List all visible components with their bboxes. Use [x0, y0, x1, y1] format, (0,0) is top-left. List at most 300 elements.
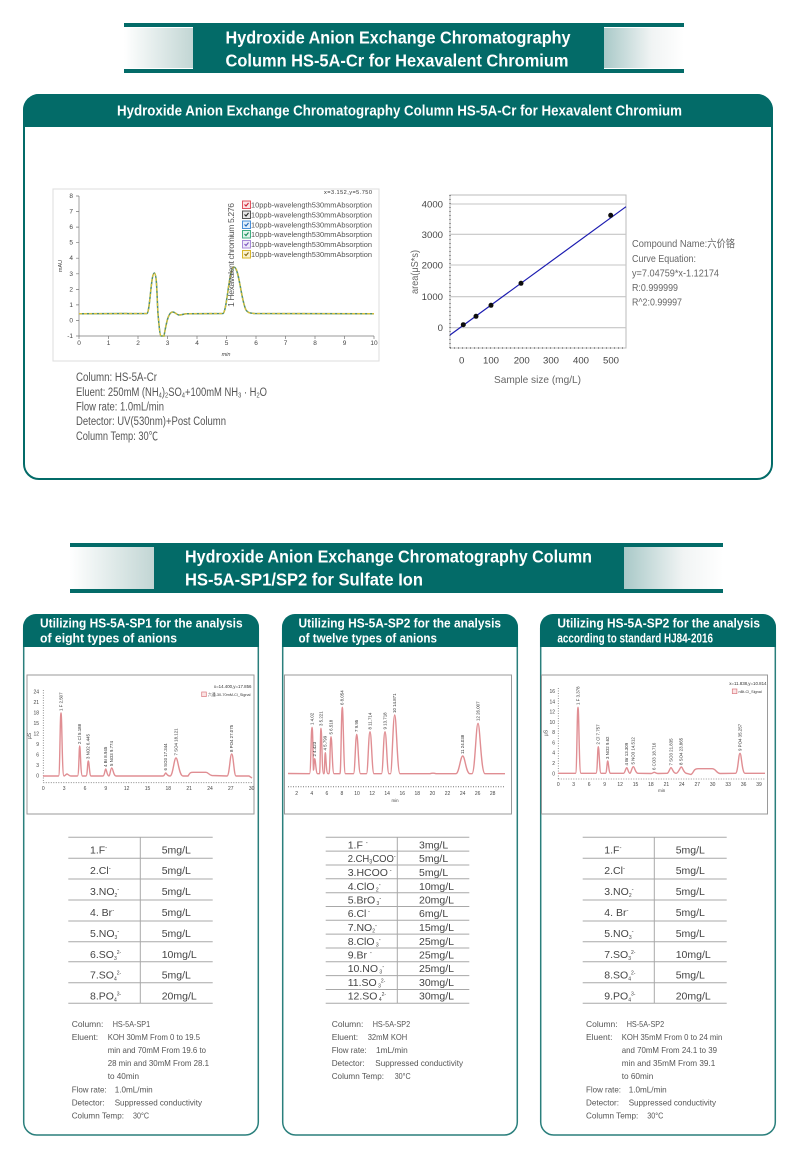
table: HJ84-2016 anion concentrations: 3.NO — [604, 886, 629, 898]
scatter chart: calibration curve: 400 — [573, 356, 589, 366]
table: twelve anion concentrations: 4 — [377, 997, 382, 1003]
line chart: UV chromatogram: mAU — [58, 260, 64, 272]
text block: Cr test conditions: +100mM NH — [185, 387, 238, 399]
chromatogram: eight anions: 9 — [36, 742, 39, 748]
table: eight anion concentrations: 2- — [117, 970, 121, 976]
table: HJ84-2016 anion concentrations: 1.F — [604, 844, 619, 856]
table: HJ84-2016 anion concentrations: 10mg/L — [676, 949, 711, 961]
table: twelve anion concentrations: 11.SO — [348, 977, 377, 989]
line chart: UV chromatogram: 3 — [69, 271, 73, 278]
table: eight anion concentrations: 5mg/L — [162, 928, 191, 940]
chart legend — [732, 689, 762, 694]
chart legend — [242, 200, 372, 259]
table: twelve anion concentrations: 3.HCOO — [348, 867, 388, 879]
table: eight anion concentrations: 4 — [114, 976, 117, 982]
scatter chart: calibration curve: 100 — [483, 356, 499, 366]
chromatogram: HJ84-2016 anions: 18 — [648, 782, 654, 788]
table: eight anion concentrations: 5mg/L — [162, 886, 191, 898]
table: twelve anion concentrations: - — [375, 923, 377, 929]
table: HJ84-2016 anion concentrations: 3- — [631, 992, 636, 998]
chromatogram: twelve anions: 4 — [310, 791, 313, 797]
table: twelve anion concentrations: 2 — [375, 887, 379, 893]
scatter chart: calibration curve: 500 — [603, 356, 619, 366]
chromatogram: eight anions: 6 — [36, 753, 39, 759]
line chart: UV chromatogram: 10 — [370, 340, 378, 347]
table: eight anion concentrations: 3 — [114, 956, 117, 962]
chromatogram: eight anions: 21 — [33, 700, 39, 706]
table: twelve anion concentrations: 3mg/L — [419, 840, 448, 852]
chromatogram: twelve anions: 5 6.518 — [328, 719, 333, 734]
text block: HJ84-2016 test conditions: HS-5A-SP2 — [627, 1019, 664, 1029]
chromatogram: HJ84-2016 anions: 0 — [557, 782, 560, 788]
table: eight anion concentrations — [68, 837, 213, 1004]
text block: HJ84-2016 test conditions: to 60min — [622, 1071, 654, 1081]
chromatogram: eight anions: 3 — [63, 786, 66, 792]
chromatogram: HJ84-2016 anions: 27 — [695, 782, 700, 788]
chromatogram: HJ84-2016 anions: μS — [544, 729, 550, 736]
table: twelve anion concentrations: - — [382, 965, 384, 971]
panel header — [282, 614, 518, 647]
chart legend — [202, 692, 251, 697]
table: twelve anion concentrations — [326, 837, 469, 1003]
table: twelve anion concentrations: 25mg/L — [419, 950, 454, 962]
text block: Cr test conditions: 3 — [238, 392, 241, 400]
table: eight anion concentrations: 3- — [117, 992, 121, 998]
panel: HS-5A-SP1 eight anions — [23, 614, 259, 1135]
chromatogram: HJ84-2016 anions: 3 — [572, 782, 575, 788]
panel: hexavalent chromium — [23, 94, 773, 479]
chromatogram: twelve anions: 9 13.718 — [382, 712, 387, 730]
text block: curve equation: Curve Equation: — [632, 253, 696, 265]
panel header: of twelve types of anions — [298, 631, 437, 646]
panel: HS-5A-SP2 twelve anions — [282, 614, 518, 1135]
text block: Cr test conditions: Flow rate: 1.0mL/min — [76, 402, 164, 414]
text block: HJ84-2016 test conditions: Flow rate: — [586, 1084, 621, 1094]
table: twelve anion concentrations: 3 — [375, 942, 379, 948]
chromatogram: twelve anions: 8 11.714 — [367, 712, 372, 730]
chromatogram: eight anions: 2 Cl 5.188 — [77, 723, 82, 744]
banner: sulfate ion section title: HS-5A-SP1/SP2 for Sulfate Ion — [185, 570, 423, 590]
table: twelve anion concentrations: 1.F — [348, 840, 363, 852]
chromatogram: HJ84-2016 anions: 7 SO3 21.835 — [668, 738, 673, 766]
text block: SP1 test conditions: Detector: — [72, 1097, 105, 1107]
panel header: Utilizing HS-5A-SP1 for the analysis — [40, 616, 243, 631]
table: eight anion concentrations: 3 — [115, 935, 118, 941]
chromatogram: eight anions: 1 F 2.507 — [58, 692, 64, 711]
line chart: UV chromatogram: 3 — [166, 340, 170, 347]
chromatogram: eight anions: μS — [27, 732, 33, 739]
chromatogram: eight anions: 7 SO4 18.121 — [173, 728, 178, 756]
chromatogram: twelve anions: 14 — [384, 791, 390, 797]
line chart: UV chromatogram: x=3.152,y=5.750 — [324, 190, 372, 196]
table: HJ84-2016 anion concentrations: 5mg/L — [676, 928, 705, 940]
text block: curve equation: R:0.999999 — [632, 282, 678, 294]
scatter chart: calibration curve: 1000 — [422, 292, 443, 303]
text block: SP2 test conditions: Detector: — [332, 1058, 365, 1068]
chromatogram: HJ84-2016 anions: 2 Cl 7.757 — [596, 724, 601, 744]
banner: hexavalent chromium section title — [124, 23, 684, 73]
text block: HJ84-2016 test conditions: min and 35mM From 39.1 — [622, 1058, 716, 1068]
chromatogram: twelve anions: 2 4.423 — [312, 741, 317, 756]
chromatogram: twelve anions: 20 — [430, 791, 435, 797]
chromatogram: eight anions: 21 — [186, 786, 192, 792]
table: eight anion concentrations: 1.F — [90, 844, 105, 856]
line chart: UV chromatogram: 5 — [69, 240, 73, 247]
text block: Cr test conditions: · H — [241, 387, 256, 399]
table: twelve anion concentrations: 25mg/L — [419, 963, 454, 975]
table: eight anion concentrations: - — [117, 887, 119, 893]
table: HJ84-2016 anion concentrations: - — [619, 846, 621, 852]
table: HJ84-2016 anion concentrations: 4 — [628, 976, 631, 982]
line chart: UV chromatogram: 1 — [107, 340, 111, 347]
table: HJ84-2016 anion concentrations: - — [623, 866, 625, 872]
chromatogram: eight anions: 24 — [33, 690, 39, 696]
table: twelve anion concentrations: - — [379, 937, 381, 943]
chromatogram: HJ84-2016 anions: 14 — [549, 699, 555, 705]
line chart: UV chromatogram: 8 — [313, 340, 317, 347]
chromatogram: HJ84-2016 anions: 8 SO4 23.865 — [679, 737, 684, 765]
table: eight anion concentrations: 5mg/L — [162, 865, 191, 877]
table: twelve anion concentrations: 25mg/L — [419, 936, 454, 948]
chromatogram: twelve anions: 26 — [475, 791, 481, 797]
chromatogram: eight anions: 8 PO4 27.075 — [229, 724, 234, 752]
text block: SP1 test conditions: Suppressed conductivity — [115, 1097, 203, 1107]
table: HJ84-2016 anion concentrations: 5mg/L — [676, 970, 705, 982]
text block: SP2 test conditions: Column: — [332, 1019, 363, 1029]
table: twelve anion concentrations: - — [366, 909, 370, 915]
chromatogram: twelve anions: 12 — [369, 791, 375, 797]
text block: HJ84-2016 test conditions: Detector: — [586, 1097, 619, 1107]
chromatogram: eight anions: 24 — [207, 786, 213, 792]
chart legend: 10ppb-wavelength530mmAbsorption — [251, 250, 372, 259]
line chart: UV chromatogram: 7 — [69, 209, 73, 216]
line chart: UV chromatogram: 7 — [284, 340, 288, 347]
table: eight anion concentrations: 2- — [117, 950, 121, 956]
panel header: according to standard HJ84-2016 — [557, 631, 713, 646]
chromatogram: eight anions: 3 NO2 6.445 — [86, 734, 91, 759]
chromatogram: twelve anions — [284, 675, 512, 814]
chart legend: 10ppb-wavelength530mmAbsorption — [251, 220, 372, 230]
table: HJ84-2016 anion concentrations: - — [626, 908, 628, 914]
line chart: UV chromatogram: 8 — [69, 193, 73, 200]
line chart: UV chromatogram: 4 — [69, 255, 73, 262]
chromatogram: twelve anions: 24 — [460, 791, 466, 797]
chromatogram: HJ84-2016 anions: x=11.838,y=10.814 — [729, 681, 767, 686]
chromatogram: eight anions: x=14.400,y=17.856 — [214, 684, 252, 689]
text block: Cr test conditions: Detector: UV(530nm)+Post Column — [76, 416, 226, 428]
table: eight anion concentrations: 5mg/L — [162, 907, 191, 919]
table: twelve anion concentrations: 10.NO — [348, 963, 378, 975]
table: twelve anion concentrations: 5.BrO — [348, 894, 375, 906]
chromatogram: twelve anions: 28 — [490, 791, 496, 797]
text block: SP2 test conditions: 30°C — [395, 1071, 411, 1081]
chromatogram: HJ84-2016 anions: 9 — [603, 782, 606, 788]
table: twelve anion concentrations: 9.Br — [348, 950, 367, 962]
table: twelve anion concentrations: - — [370, 950, 372, 956]
table: twelve anion concentrations: 2- — [381, 978, 386, 984]
table: HJ84-2016 anion concentrations: 4 — [628, 998, 631, 1004]
text block: SP1 test conditions: 1.0mL/min — [115, 1084, 153, 1094]
table: twelve anion concentrations: 7.NO — [348, 922, 372, 934]
chromatogram: eight anions: 27 — [228, 786, 234, 792]
banner: sulfate ion section title — [70, 543, 723, 593]
text block: SP1 test conditions: HS-5A-SP1 — [113, 1019, 150, 1029]
table: twelve anion concentrations: 6mg/L — [419, 908, 448, 920]
text block: Cr test conditions: 4 — [159, 392, 162, 400]
chromatogram: HJ84-2016 anions: 39 — [756, 782, 762, 788]
chromatogram: HJ84-2016 anions: 21 — [664, 782, 669, 788]
line chart: UV chromatogram: 0 — [77, 340, 81, 347]
table: twelve anion concentrations: 2.CH — [348, 853, 372, 865]
chromatogram: twelve anions: 8 — [341, 791, 344, 797]
text block: SP1 test conditions: Eluent: — [72, 1032, 98, 1042]
text block: SP1 test conditions: Column Temp: — [72, 1111, 124, 1121]
text block: Cr test conditions: Column Temp: 30℃ — [76, 431, 158, 443]
text block: Cr test conditions: 2 — [165, 392, 168, 400]
scatter chart: calibration curve: 3000 — [422, 230, 443, 241]
table: eight anion concentrations: - — [112, 908, 114, 914]
panel header — [23, 94, 773, 127]
chromatogram: HJ84-2016 anions: 6 — [552, 740, 555, 746]
table: HJ84-2016 anion concentrations: 5mg/L — [676, 907, 705, 919]
chromatogram: twelve anions: 18 — [415, 791, 420, 797]
chromatogram: eight anions: 4 Br 8.945 — [103, 746, 108, 767]
text block: SP1 test conditions: 28 min and 30mM From 28.1 — [108, 1058, 209, 1068]
panel header — [540, 614, 776, 647]
text block: HJ84-2016 test conditions: Column: — [586, 1019, 618, 1029]
chromatogram: HJ84-2016 anions: 4 Br 13.309 — [624, 742, 629, 766]
line chart: UV chromatogram — [53, 189, 379, 361]
text block: SP1 test conditions: KOH 30mM From 0 to 19.5 — [108, 1032, 200, 1042]
text block: HJ84-2016 test conditions: 1.0mL/min — [629, 1084, 667, 1094]
chromatogram: twelve anions: 11 24.038 — [460, 734, 465, 754]
text block: SP1 test conditions: Column: — [72, 1019, 103, 1029]
chromatogram: HJ84-2016 anions: 10 — [549, 720, 555, 726]
table: HJ84-2016 anion concentrations: 4. Br — [604, 907, 626, 919]
chromatogram: twelve anions: 3 5.221 — [318, 711, 323, 726]
table: twelve anion concentrations: 4.ClO — [348, 881, 375, 893]
chromatogram: twelve anions: 6 8.054 — [340, 690, 345, 705]
panel header: of eight types of anions — [40, 631, 177, 646]
chromatogram: HJ84-2016 anions: 3 NO2 9.62 — [605, 736, 610, 759]
chromatogram: eight anions: 12 — [33, 732, 39, 738]
chromatogram: eight anions: 30 — [249, 786, 255, 792]
table: twelve anion concentrations: COO — [372, 853, 394, 865]
chromatogram: twelve anions: 6 — [326, 791, 329, 797]
table: twelve anion concentrations: 30mg/L — [419, 977, 454, 989]
table: twelve anion concentrations: 3 — [375, 901, 380, 907]
text block: SP1 test conditions: min and 70mM From 19.6 to — [108, 1045, 206, 1055]
text block: curve equation: R^2:0.99997 — [632, 296, 682, 308]
text block: SP1 test conditions — [72, 1019, 209, 1121]
chromatogram: HJ84-2016 anions: 16 — [549, 689, 555, 695]
line chart: UV chromatogram: 4 — [195, 340, 199, 347]
chromatogram: twelve anions: 12 26.007 — [475, 701, 480, 721]
text block: Cr test conditions: Column: HS-5A-Cr — [76, 372, 157, 384]
chromatogram: twelve anions: 4 5.799 — [323, 735, 328, 750]
chromatogram: eight anions — [27, 675, 255, 814]
text block: SP1 test conditions: 30°C — [133, 1111, 149, 1121]
text block: SP2 test conditions: Suppressed conductivity — [375, 1058, 464, 1068]
chromatogram: HJ84-2016 anions: 6 CO3 18.716 — [652, 742, 657, 770]
chromatogram: twelve anions: 2 — [295, 791, 298, 797]
text block: SP2 test conditions — [332, 1019, 464, 1081]
chromatogram: HJ84-2016 anions: 33 — [725, 782, 731, 788]
text block: SP2 test conditions: 1mL/min — [376, 1045, 408, 1055]
table: HJ84-2016 anion concentrations: 2- — [631, 970, 636, 976]
scatter chart: calibration curve: 4000 — [422, 200, 443, 210]
banner: sulfate ion section title: Hydroxide Anion Exchange Chromatography Column — [185, 547, 592, 567]
chart legend: 10ppb-wavelength530mmAbsorption — [251, 200, 372, 210]
chromatogram: HJ84-2016 anions: 12 — [549, 710, 555, 716]
chromatogram: HJ84-2016 anions: 12 — [617, 782, 623, 788]
chromatogram: eight anions: 18 — [166, 786, 171, 792]
table: HJ84-2016 anion concentrations: 3 — [628, 956, 631, 962]
table: eight anion concentrations: - — [117, 929, 119, 935]
table: eight anion concentrations: 6.SO — [90, 949, 114, 961]
table: twelve anion concentrations: - — [379, 896, 381, 902]
text block: SP2 test conditions: 32mM KOH — [368, 1032, 407, 1042]
table: HJ84-2016 anion concentrations: 3 — [629, 935, 632, 941]
text block: HJ84-2016 test conditions — [586, 1019, 723, 1121]
chart legend: 10ppb-wavelength530mmAbsorption — [251, 230, 372, 239]
table: twelve anion concentrations: 8.ClO — [348, 936, 375, 948]
chromatogram: HJ84-2016 anions: 36 — [741, 782, 747, 788]
table: twelve anion concentrations: 5mg/L — [419, 867, 448, 879]
table: HJ84-2016 anion concentrations: 8.SO — [604, 970, 628, 982]
scatter chart: calibration curve: 0 — [438, 323, 443, 334]
table: eight anion concentrations: 3.NO — [90, 886, 115, 898]
table: twelve anion concentrations: 5mg/L — [419, 853, 448, 865]
text block: SP2 test conditions: Flow rate: — [332, 1045, 367, 1055]
chromatogram: HJ84-2016 anions: 4 — [552, 751, 555, 757]
scatter chart: calibration curve: 0 — [459, 356, 464, 366]
chart legend: 10ppb-wavelength530mmAbsorption — [251, 210, 372, 220]
chromatogram: eight anions: 3 — [36, 763, 39, 769]
text block: Cr test conditions: O — [260, 387, 267, 399]
chromatogram: HJ84-2016 anions: 15 — [633, 782, 638, 788]
chart legend: 10ppb-wavelength530mmAbsorption — [251, 240, 372, 249]
line chart: UV chromatogram: 0 — [69, 318, 73, 324]
table: twelve anion concentrations: 2- — [382, 992, 386, 998]
text block: HJ84-2016 test conditions: Suppressed conductivity — [629, 1097, 717, 1107]
text block: Cr test conditions: 2 — [256, 392, 260, 400]
line chart: UV chromatogram: 1 Hexavalent chromium 5.276 — [226, 203, 236, 307]
scatter chart: calibration curve — [409, 195, 626, 386]
table: twelve anion concentrations: 30mg/L — [419, 990, 454, 1002]
scatter chart: calibration curve: 200 — [514, 356, 530, 366]
text block: SP2 test conditions: HS-5A-SP2 — [373, 1019, 410, 1029]
scatter chart: calibration curve: 300 — [543, 356, 559, 366]
line chart: UV chromatogram: 5 — [225, 340, 229, 347]
table: HJ84-2016 anion concentrations: - — [632, 929, 634, 935]
line chart: UV chromatogram: 6 — [254, 340, 258, 347]
text block: Cr test conditions: Eluent: 250mM (NH — [76, 387, 177, 399]
table: twelve anion concentrations: - — [388, 868, 392, 874]
text block: curve equation: Compound Name:六价铬 — [632, 237, 735, 250]
table: HJ84-2016 anion concentrations: 20mg/L — [676, 990, 711, 1002]
table: twelve anion concentrations: - — [366, 840, 368, 846]
text block: Cr test conditions: ) — [162, 387, 165, 399]
table: HJ84-2016 anion concentrations: 7.SO — [604, 949, 628, 961]
chromatogram: HJ84-2016 anions: 30 — [710, 782, 716, 788]
text block: Cr test conditions — [76, 372, 267, 443]
table: twelve anion concentrations: 2 — [372, 928, 375, 934]
table: HJ84-2016 anion concentrations: 2- — [631, 950, 636, 956]
table: twelve anion concentrations: - — [379, 882, 381, 888]
text block: Cr test conditions: SO — [168, 387, 182, 399]
table: eight anion concentrations: - — [105, 846, 107, 852]
banner: hexavalent chromium section title: Column HS-5A-Cr for Hexavalent Chromium — [226, 51, 568, 71]
chromatogram: HJ84-2016 anions: 8 — [552, 730, 555, 736]
table: HJ84-2016 anion concentrations: 5mg/L — [676, 886, 705, 898]
text block: SP2 test conditions: Eluent: — [332, 1032, 358, 1042]
table: HJ84-2016 anion concentrations — [583, 837, 727, 1004]
chromatogram: HJ84-2016 anions: 1 F 3.378 — [575, 686, 580, 705]
text block: curve equation: y=7.04759*x-1.12174 — [632, 268, 719, 280]
panel header: Utilizing HS-5A-SP2 for the analysis — [298, 616, 501, 631]
panel header: Hydroxide Anion Exchange Chromatography Column HS-5A-Cr for Hexavalent Chromium — [117, 103, 682, 119]
table: eight anion concentrations: - — [109, 866, 111, 872]
panel header: Utilizing HS-5A-SP2 for the analysis — [557, 616, 760, 631]
text block: HJ84-2016 test conditions: and 70mM From 24.1 to 39 — [622, 1045, 717, 1055]
table: twelve anion concentrations: 6.Cl — [348, 908, 366, 920]
table: eight anion concentrations: 2.Cl — [90, 865, 109, 877]
scatter chart: calibration curve: Sample size (mg/L) — [494, 374, 581, 386]
table: HJ84-2016 anion concentrations: 5mg/L — [676, 865, 705, 877]
chromatogram: eight anions: 12 — [124, 786, 130, 792]
scatter chart: calibration curve: 2000 — [422, 260, 443, 272]
table: eight anion concentrations: 5mg/L — [162, 844, 191, 856]
chart legend: 六通-30-70mM-Cl_Signal — [208, 692, 251, 697]
table: HJ84-2016 anion concentrations: - — [632, 887, 634, 893]
chromatogram: HJ84-2016 anions: 9 PO4 35.257 — [737, 723, 742, 751]
chromatogram: eight anions: 15 — [33, 721, 39, 727]
scatter chart: calibration curve: area(μS*s) — [409, 250, 421, 294]
line chart: UV chromatogram: 1 — [69, 302, 73, 309]
chromatogram: twelve anions: 10 14.871 — [392, 693, 397, 713]
chromatogram: eight anions: 6 SO3 17.344 — [163, 743, 168, 770]
table: eight anion concentrations: 2 — [115, 893, 118, 899]
text block: HJ84-2016 test conditions: 30°C — [647, 1111, 663, 1121]
banner: hexavalent chromium section title: Hydroxide Anion Exchange Chromatography — [226, 27, 571, 47]
table: twelve anion concentrations: 3 — [378, 970, 382, 976]
table: twelve anion concentrations: - — [394, 854, 396, 860]
chromatogram: eight anions: 5 NO3 9.774 — [109, 741, 114, 766]
table: twelve anion concentrations: 3 — [369, 860, 373, 866]
table: eight anion concentrations: 5mg/L — [162, 970, 191, 982]
text block: SP1 test conditions: to 40min — [108, 1071, 139, 1081]
text block: Cr test conditions: 4 — [182, 392, 185, 400]
chromatogram: eight anions: 18 — [33, 711, 39, 717]
table: eight anion concentrations: 8.PO — [90, 990, 114, 1002]
text block: SP1 test conditions: Flow rate: — [72, 1084, 107, 1094]
chromatogram: eight anions: 9 — [104, 786, 107, 792]
chromatogram: eight anions: 0 — [36, 774, 39, 780]
line chart: UV chromatogram: min — [222, 352, 230, 358]
chromatogram: HJ84-2016 anions: min — [658, 788, 666, 793]
table: eight anion concentrations: 7.SO — [90, 970, 114, 982]
chromatogram: twelve anions: 16 — [400, 791, 405, 797]
table: HJ84-2016 anion concentrations: 5.NO — [604, 928, 629, 940]
table: twelve anion concentrations: 3 — [377, 983, 381, 989]
line chart: UV chromatogram: 2 — [69, 286, 73, 293]
chromatogram: twelve anions: 1 4.02 — [309, 712, 314, 725]
text block: curve equation — [632, 237, 735, 308]
table: twelve anion concentrations: 10mg/L — [419, 881, 454, 893]
chromatogram: HJ84-2016 anions: 6 — [588, 782, 591, 788]
panel header — [23, 614, 259, 647]
